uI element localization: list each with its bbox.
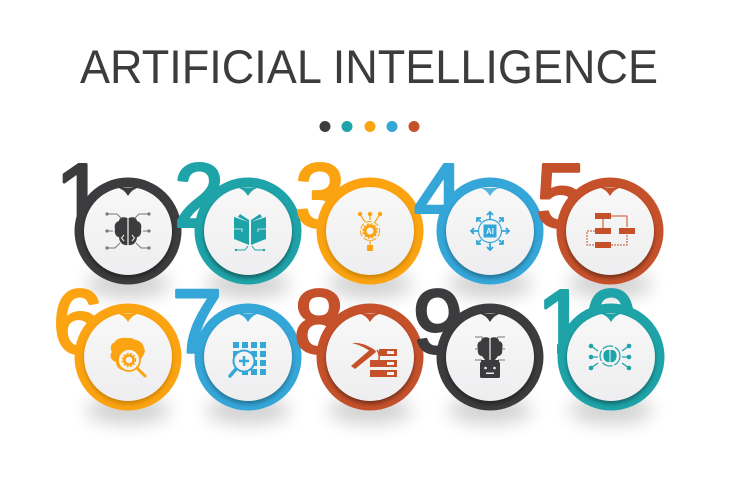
icon: flowchart (587, 213, 635, 248)
item 4 (414, 146, 544, 284)
item 1 (62, 163, 182, 284)
number 10: 0 (586, 272, 636, 372)
number 9: 9 (413, 272, 463, 372)
item 5 (536, 146, 664, 284)
item 7 (172, 272, 302, 410)
item 9 (413, 272, 544, 410)
item 2 (174, 146, 302, 284)
item 3 (295, 146, 424, 284)
number 10 (544, 288, 633, 354)
icon: pickaxe and data blocks (351, 343, 397, 377)
number 8: 8 (294, 272, 344, 372)
title: ARTIFICIAL INTELLIGENCE (80, 40, 658, 93)
number 1: 1 (56, 146, 106, 246)
icon: circuit brain (589, 344, 631, 370)
icon: open book with brain (234, 214, 266, 251)
item 8 (294, 272, 424, 410)
icon: AI chip with arrows: AI (486, 227, 494, 236)
item 6 (53, 272, 182, 410)
number 7: 7 (172, 272, 222, 372)
icon: grid with magnifier (230, 342, 266, 376)
soft drop shadows (86, 270, 653, 424)
icon: gear with idea nodes (358, 212, 382, 251)
icon: brain with circuits (105, 212, 151, 250)
icon: robot head with brain (475, 337, 505, 378)
number 2: 2 (174, 146, 224, 246)
number 5: 5 (536, 146, 586, 246)
item 10 (544, 288, 664, 410)
number 3: 3 (295, 146, 345, 246)
number 6: 6 (53, 272, 103, 372)
icon: brain with gear and magnifier (111, 338, 145, 376)
number 10: 1 (537, 272, 587, 372)
number 4: 4 (414, 146, 464, 246)
colored dots row (320, 121, 420, 132)
